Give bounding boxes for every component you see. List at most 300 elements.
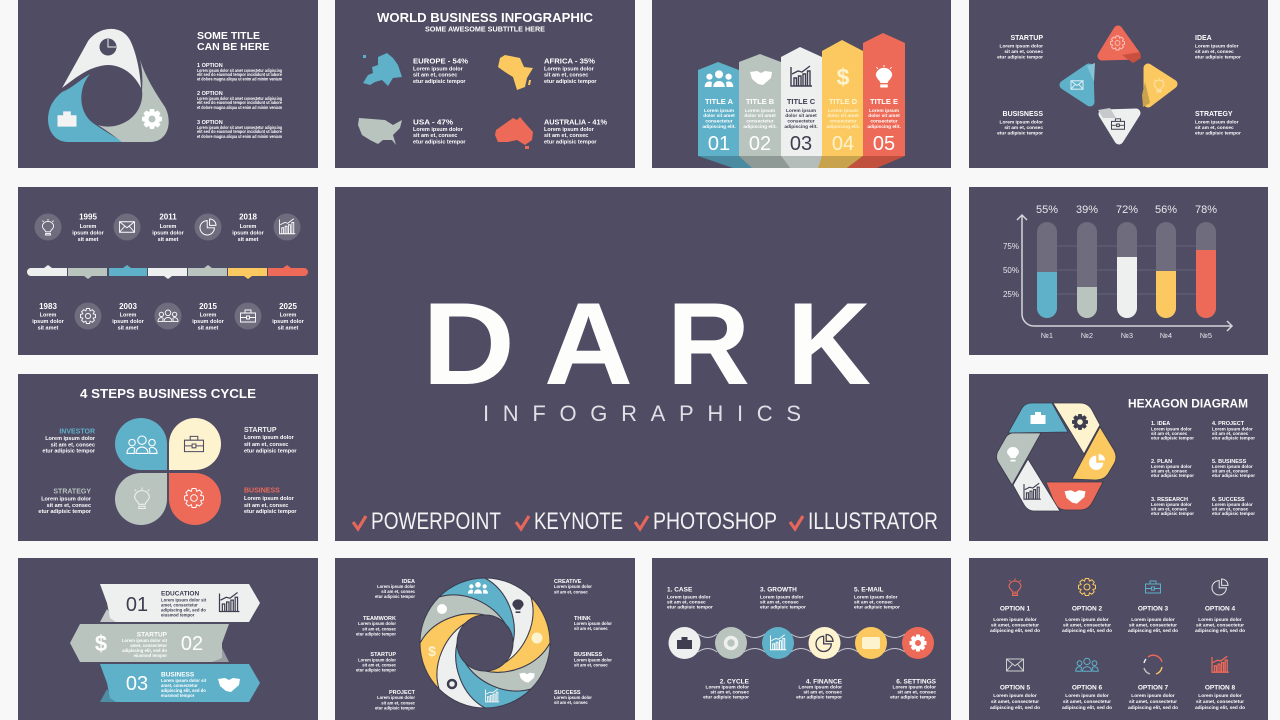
label: business: sit am et, consec: [1004, 125, 1043, 131]
year 2011: sit amet: [158, 237, 179, 243]
label: 3 growth: etur adipisic tempor: [760, 604, 806, 610]
title: 4 STEPS BUSINESS CYCLE: [80, 386, 256, 401]
x axis labels: №4: [1160, 331, 1172, 340]
panel: spiral: [335, 558, 635, 720]
y axis labels: 25%: [1003, 290, 1019, 299]
label: strategy: STRATEGY: [1195, 111, 1233, 118]
year 2003: 2003: [119, 302, 137, 311]
label: startup: STARTUP: [244, 427, 277, 434]
option 2: [1062, 578, 1112, 634]
icon: gear: [74, 302, 102, 330]
Africa text: sit am et, consec: [544, 72, 588, 78]
year 2011: ipsum dolor: [152, 230, 185, 236]
label: 5 e-mail: etur adipisic tempor: [854, 604, 900, 610]
option 6: adipiscing elit, sed do: [1062, 705, 1112, 711]
option 4: [1195, 579, 1245, 634]
year 2018: [232, 212, 265, 243]
icon: briefcase: [58, 111, 76, 127]
option 5: adipiscing elit, sed do: [990, 705, 1040, 711]
label: idea: [375, 579, 416, 599]
gridlines: [1057, 246, 1196, 294]
label: startup: [244, 427, 297, 454]
column A: 01: [708, 133, 730, 155]
year 1995: ipsum dolor: [72, 230, 105, 236]
year 2015: sit amet: [198, 326, 219, 332]
label: teamwork: sit am et, consec: [362, 626, 397, 632]
label: idea: Lorem ipsum dolor: [377, 584, 415, 589]
label: creative: CREATIVE: [554, 579, 582, 585]
year 2025: sit amet: [278, 326, 299, 332]
column A: consectetur: [705, 118, 733, 124]
ribbon 01: amet, consectetur: [161, 602, 198, 608]
format list: PHOTOSHOP: [653, 508, 777, 535]
label: business: BUSINESS: [244, 488, 280, 494]
option 3: adipiscing elit, sed do: [1128, 628, 1178, 634]
x axis labels: №2: [1081, 331, 1093, 340]
icon: people: [468, 582, 488, 594]
percent labels: 78%: [1195, 204, 1217, 216]
ribbon 03: eiusmod tempor: [161, 693, 195, 698]
Australia text: etur adipisic tempor: [544, 140, 597, 146]
column shadows: [698, 156, 905, 168]
column C: adipiscing elit.: [784, 124, 818, 130]
check: PowerPoint: [353, 516, 366, 529]
item 6: 6. SUCCESS: [1212, 497, 1245, 503]
item 1: etur adipisic tempor: [1151, 436, 1194, 440]
label: strategy: [38, 488, 92, 515]
option list: 2 OPTION: [197, 91, 223, 97]
label: startup: Lorem ipsum dolor: [1000, 44, 1043, 50]
label: startup: sit am et, consec: [244, 442, 288, 448]
label: business: sit am et, consec: [244, 503, 288, 509]
column B: dolor sit amet: [744, 113, 776, 119]
option list: Lorem ipsum dolor sit amet consectetur adipiscing: [197, 125, 282, 131]
icon: dollar: $: [95, 631, 107, 656]
option list: et dolore magna aliqua ut enim ad minim veniam: [197, 105, 282, 111]
option 7: [1128, 655, 1178, 711]
Africa text: Lorem ipsum dolor: [544, 66, 595, 72]
option 8: OPTION 8: [1205, 684, 1236, 692]
Africa text: AFRICA - 35%: [544, 58, 596, 66]
label: startup: etur adipisic tempor: [244, 448, 297, 454]
label: success: [554, 690, 592, 705]
label: think: [574, 616, 612, 631]
node: finance: [808, 627, 840, 659]
panel: five arrow columns: [652, 0, 951, 168]
ribbon 02: 02: [181, 633, 203, 655]
label: business: [574, 652, 612, 668]
column D: adipiscing elit.: [826, 124, 860, 130]
column C: Lorem ipsum: [786, 108, 816, 114]
item 6: [1212, 497, 1255, 516]
heading: SOME TITLE: [197, 30, 260, 42]
USA text: [413, 120, 466, 146]
panel: timeline: [18, 187, 318, 355]
option 1: OPTION 1: [1000, 606, 1031, 612]
panel: triangle cycle: [18, 0, 318, 168]
format list: [353, 508, 938, 535]
label: investor: [42, 428, 96, 454]
label: strategy: etur adipisic tempor: [1195, 130, 1241, 136]
map: Africa: [498, 55, 533, 90]
label: idea: [1195, 35, 1241, 60]
year 2025: ipsum dolor: [272, 319, 305, 325]
ribbon 01: EDUCATION: [161, 590, 199, 598]
title DARK: D: [422, 278, 515, 409]
year 2025: [272, 302, 305, 332]
option 7: Lorem ipsum dolor: [1131, 693, 1175, 699]
column B: Lorem ipsum: [745, 108, 775, 114]
icon: handshake: [1065, 490, 1085, 504]
icon: pie: [194, 214, 222, 240]
column B: consectetur: [746, 118, 774, 124]
option 8: adipiscing elit, sed do: [1195, 705, 1245, 711]
icon: envelope: [114, 214, 140, 240]
panel: bar chart: [969, 187, 1268, 355]
column E: [863, 33, 905, 156]
year 2015: 2015: [199, 302, 217, 311]
title DARK: R: [667, 278, 750, 409]
label: investor: etur adipisic tempor: [42, 448, 96, 454]
option 7: sit amet, consectetur: [1129, 699, 1177, 705]
icon: people: [705, 70, 733, 87]
year 1995: Lorem: [80, 224, 97, 230]
item 6: sit am et, consec: [1212, 506, 1249, 512]
item 1: Lorem ipsum dolor: [1151, 426, 1192, 432]
Australia text: Lorem ipsum dolor: [544, 127, 595, 133]
label: idea: sit am et, consec: [1195, 49, 1234, 55]
label: business: BUSINESS: [574, 652, 602, 658]
label: 2 cycle: [703, 678, 750, 700]
column A: TITLE A: [705, 97, 734, 106]
USA text: sit am et, consec: [413, 133, 457, 139]
icon: handshake: [218, 678, 240, 692]
label: strategy: [1195, 111, 1241, 136]
label: startup: [997, 35, 1043, 60]
label: teamwork: etur adipisic tempor: [356, 632, 396, 636]
option list: 1 OPTION: [197, 63, 223, 69]
ribbon 02: amet, consectetur: [130, 643, 167, 648]
node: cycle: [715, 627, 747, 659]
icon: people: [154, 302, 182, 330]
bar 4: [1156, 222, 1176, 318]
option 3: sit amet, consectetur: [1129, 622, 1177, 628]
column D: dolor sit amet: [827, 113, 859, 119]
year 1983: [32, 302, 65, 332]
Europe text: etur adipisic tempor: [413, 79, 466, 85]
label: project: [375, 690, 416, 710]
column A: [698, 62, 739, 156]
item 3: etur adipisic tempor: [1151, 511, 1194, 516]
label: success: SUCCESS: [554, 690, 581, 696]
option 6: [1062, 658, 1112, 711]
option 2: adipiscing elit, sed do: [1062, 628, 1112, 634]
column D: consectetur: [829, 118, 857, 124]
label: success: sit am et, consec: [554, 700, 588, 705]
column B: adipiscing elit.: [743, 124, 777, 130]
year 1995: 1995: [79, 212, 97, 222]
label: 3 growth: sit am et, consec: [760, 600, 799, 606]
ribbon 03: [100, 664, 260, 702]
item 4: 4. PROJECT: [1212, 421, 1245, 427]
label: 4 finance: 4. FINANCE: [806, 678, 843, 686]
Australia text: sit am et, consec: [544, 133, 588, 139]
option 6: sit amet, consectetur: [1063, 699, 1111, 705]
Africa text: etur adipisic tempor: [544, 79, 597, 85]
year 2015: [192, 302, 225, 332]
y axis labels: 75%: [1003, 242, 1019, 251]
label: creative: Lorem ipsum dolor: [554, 584, 592, 589]
option 2: Lorem ipsum dolor: [1065, 617, 1109, 623]
option 4: Lorem ipsum dolor: [1198, 617, 1242, 623]
label: idea: sit am et, consec: [381, 589, 416, 594]
year 1983: Lorem: [40, 312, 57, 318]
year 2015: ipsum dolor: [192, 319, 225, 325]
year 1995: [72, 212, 105, 243]
column E: 05: [873, 133, 895, 155]
option list: Lorem ipsum dolor sit amet consectetur adipiscing: [197, 68, 282, 74]
icon: pie: [1089, 454, 1105, 470]
title: HEXAGON DIAGRAM: [1128, 398, 1248, 410]
year 1983: 1983: [39, 302, 57, 311]
check: Illustrator: [790, 516, 803, 529]
option 7: OPTION 7: [1138, 684, 1169, 692]
option list: elit sed do eiusmod tempor incididunt ut labore: [197, 72, 282, 78]
item 2: Lorem ipsum dolor: [1151, 464, 1192, 469]
label: 1 case: 1. CASE: [667, 586, 693, 594]
triangle: red: [1102, 30, 1141, 63]
panel: center title: [335, 187, 951, 541]
label: 2 cycle: 2. CYCLE: [720, 678, 750, 686]
label: 4 finance: etur adipisic tempor: [796, 694, 842, 700]
column B: [739, 54, 781, 156]
icon: handshake: [519, 673, 535, 683]
x axis labels: №5: [1200, 331, 1212, 340]
percent labels: 55%: [1036, 204, 1058, 216]
label: strategy: etur adipisic tempor: [38, 509, 92, 515]
icon: briefcase: [1030, 412, 1046, 424]
subtitle: INFOGRAPHICS: [483, 401, 801, 426]
icon: pie: [100, 38, 116, 56]
label: startup: sit am et, consec: [1004, 49, 1043, 55]
ribbon 01: Lorem ipsum dolor sit: [161, 598, 207, 602]
label: 4 finance: Lorem ipsum dolor: [799, 684, 842, 690]
label: 6 settings: etur adipisic tempor: [890, 694, 936, 700]
panel: 4 steps business cycle: [18, 374, 318, 541]
label: startup: STARTUP: [1010, 35, 1043, 42]
label: 4 finance: [796, 678, 843, 700]
column D: 04: [832, 133, 854, 155]
label: think: sit am et, consec: [574, 626, 608, 631]
ribbon 01: adipiscing elit, sed do: [161, 608, 206, 612]
icon: gear: [142, 109, 162, 129]
column C: 03: [790, 133, 812, 155]
option list: [197, 63, 282, 140]
item 2: [1151, 459, 1194, 478]
label: business: Lorem ipsum dolor: [244, 496, 295, 502]
label: idea: IDEA: [402, 579, 415, 585]
column C: consectetur: [787, 118, 815, 124]
panel: ribbons: [18, 558, 318, 720]
panel: eight options: [969, 558, 1268, 720]
label: 6 settings: 6. SETTINGS: [896, 678, 937, 686]
label: 5 e-mail: [854, 586, 900, 610]
label: 2 cycle: sit am et, consec: [710, 690, 749, 696]
check: Keynote: [516, 516, 529, 529]
option list: Lorem ipsum dolor sit amet consectetur adipiscing: [197, 96, 282, 102]
label: investor: sit am et, consec: [51, 442, 95, 448]
label: project: sit am et, consec: [381, 700, 416, 706]
option 1: [990, 578, 1040, 634]
Europe text: EUROPE - 54%: [413, 58, 469, 66]
icon: dollar: $: [428, 643, 436, 659]
label: strategy: Lorem ipsum dolor: [41, 496, 92, 502]
title: WORLD BUSINESS INFOGRAPHIC: [377, 10, 594, 25]
item 4: etur adipisic tempor: [1212, 436, 1255, 440]
node: case: [668, 627, 700, 659]
label: 5 e-mail: Lorem ipsum dolor: [854, 594, 898, 600]
column E: TITLE E: [870, 97, 898, 106]
option list: 3 OPTION: [197, 120, 223, 126]
item 6: Lorem ipsum dolor: [1212, 502, 1253, 507]
label: 5 e-mail: sit am et, consec: [854, 600, 893, 606]
option 5: Lorem ipsum dolor: [993, 693, 1037, 699]
item 4: Lorem ipsum dolor: [1212, 426, 1253, 432]
label: strategy: sit am et, consec: [1195, 125, 1234, 131]
icon: pie: [532, 632, 542, 644]
item 2: 2. PLAN: [1151, 459, 1172, 465]
axes: [1017, 215, 1232, 331]
year 2011: Lorem: [160, 224, 177, 230]
year 2018: sit amet: [238, 237, 259, 243]
label: business: etur adipisic tempor: [244, 509, 297, 515]
column B: TITLE B: [746, 97, 775, 106]
label: business: Lorem ipsum dolor: [574, 658, 612, 662]
node: growth: [762, 627, 794, 659]
item 1: 1. IDEA: [1151, 421, 1170, 427]
ribbon 03: adipiscing elit, sed do: [161, 688, 206, 693]
option 1: sit amet, consectetur: [991, 622, 1039, 628]
Europe text: sit am et, consec: [413, 72, 457, 78]
label: startup: Lorem ipsum dolor: [244, 435, 295, 441]
icon: gear: [1072, 414, 1088, 430]
label: startup: etur adipisic tempor: [997, 54, 1043, 60]
ribbon 03: amet, consectetur: [161, 683, 198, 688]
format list: ILLUSTRATOR: [808, 508, 938, 535]
bar 3: [1117, 222, 1137, 318]
label: business: [997, 111, 1043, 136]
column E: dolor sit amet: [868, 113, 900, 119]
year 1995: sit amet: [78, 237, 99, 243]
ribbon 02: adipiscing elit, sed do: [122, 648, 167, 653]
map: Australia: [495, 117, 533, 149]
label: 1 case: sit am et, consec: [667, 600, 706, 606]
item 5: sit am et, consec: [1212, 468, 1249, 474]
ribbon 02: Lorem ipsum dolor sit: [122, 638, 168, 643]
connector waves: [698, 634, 905, 652]
year 2003: [112, 302, 145, 332]
icon: pie left: [437, 604, 447, 614]
year 2003: Lorem: [120, 312, 137, 318]
item 2: etur adipisic tempor: [1151, 473, 1194, 478]
x axis labels: [1041, 331, 1212, 340]
option 4: sit amet, consectetur: [1196, 622, 1244, 628]
year 2018: 2018: [239, 212, 257, 222]
item 2: sit am et, consec: [1151, 468, 1188, 474]
option 1: adipiscing elit, sed do: [990, 628, 1040, 634]
icon: chart: [274, 214, 300, 240]
option list: elit sed do eiusmod tempor incididunt ut labore: [197, 129, 282, 135]
label: 1 case: etur adipisic tempor: [667, 604, 713, 610]
option 8: sit amet, consectetur: [1196, 699, 1244, 705]
label: business: BUSISNESS: [1003, 111, 1043, 118]
subtitle: SOME AWESOME SUBTITLE HERE: [425, 26, 545, 34]
ribbon 01: [100, 584, 260, 622]
label: success: Lorem ipsum dolor: [554, 695, 592, 700]
label: 6 settings: Lorem ipsum dolor: [893, 684, 936, 690]
ribbon 02: [70, 624, 229, 662]
icon: bulb: [876, 65, 892, 87]
option list: et dolore magna aliqua ut enim ad minim veniam: [197, 76, 282, 82]
petal: red: [169, 473, 221, 525]
option list: elit sed do eiusmod tempor incididunt ut labore: [197, 100, 282, 106]
label: business: Lorem ipsum dolor: [1000, 120, 1043, 126]
label: creative: [554, 579, 592, 594]
option 2: sit amet, consectetur: [1063, 622, 1111, 628]
Australia text: [544, 120, 608, 146]
label: business: [244, 488, 297, 515]
panel: world business infographic: [335, 0, 635, 168]
label: startup: STARTUP: [370, 652, 396, 658]
percent labels: 39%: [1076, 204, 1098, 216]
map: Europe: [363, 53, 402, 86]
ribbon 03: BUSINESS: [161, 672, 195, 678]
icon: dollar: $: [837, 64, 850, 90]
label: business: etur adipisic tempor: [997, 130, 1043, 136]
y axis labels: [1003, 242, 1019, 299]
option 3: Lorem ipsum dolor: [1131, 617, 1175, 623]
label: project: Lorem ipsum dolor: [377, 695, 415, 700]
item 4: sit am et, consec: [1212, 431, 1249, 436]
bar 1: [1037, 222, 1057, 318]
format list: KEYNOTE: [534, 508, 623, 535]
node: e-mail: [855, 627, 887, 659]
ribbon 03: 03: [126, 673, 148, 695]
panel: process chain: [652, 558, 951, 720]
icon: chart: [791, 66, 812, 86]
column C: dolor sit amet: [785, 113, 817, 119]
icon: bulb: [34, 214, 62, 240]
triangle: yellow: [1142, 68, 1173, 107]
Africa text: [544, 58, 597, 85]
label: teamwork: Lorem ipsum dolor: [358, 621, 396, 626]
column A: dolor sit amet: [703, 113, 735, 119]
label: idea: etur adipisic tempor: [375, 594, 415, 599]
column B: 02: [749, 133, 771, 155]
ribbon 03: Lorem ipsum dolor sit: [161, 678, 207, 683]
icon: bulb: [1007, 444, 1019, 462]
column D: [822, 40, 863, 156]
icon: target: [448, 680, 456, 688]
option 3: [1128, 581, 1178, 634]
option 7: adipiscing elit, sed do: [1128, 705, 1178, 711]
petal: grey: [115, 473, 167, 525]
percent labels: [1036, 204, 1217, 216]
label: think: Lorem ipsum dolor: [574, 621, 612, 626]
label: 1 case: Lorem ipsum dolor: [667, 594, 711, 600]
title DARK: A: [544, 278, 633, 409]
ribbon 01: eiusmod tempor: [161, 612, 195, 618]
